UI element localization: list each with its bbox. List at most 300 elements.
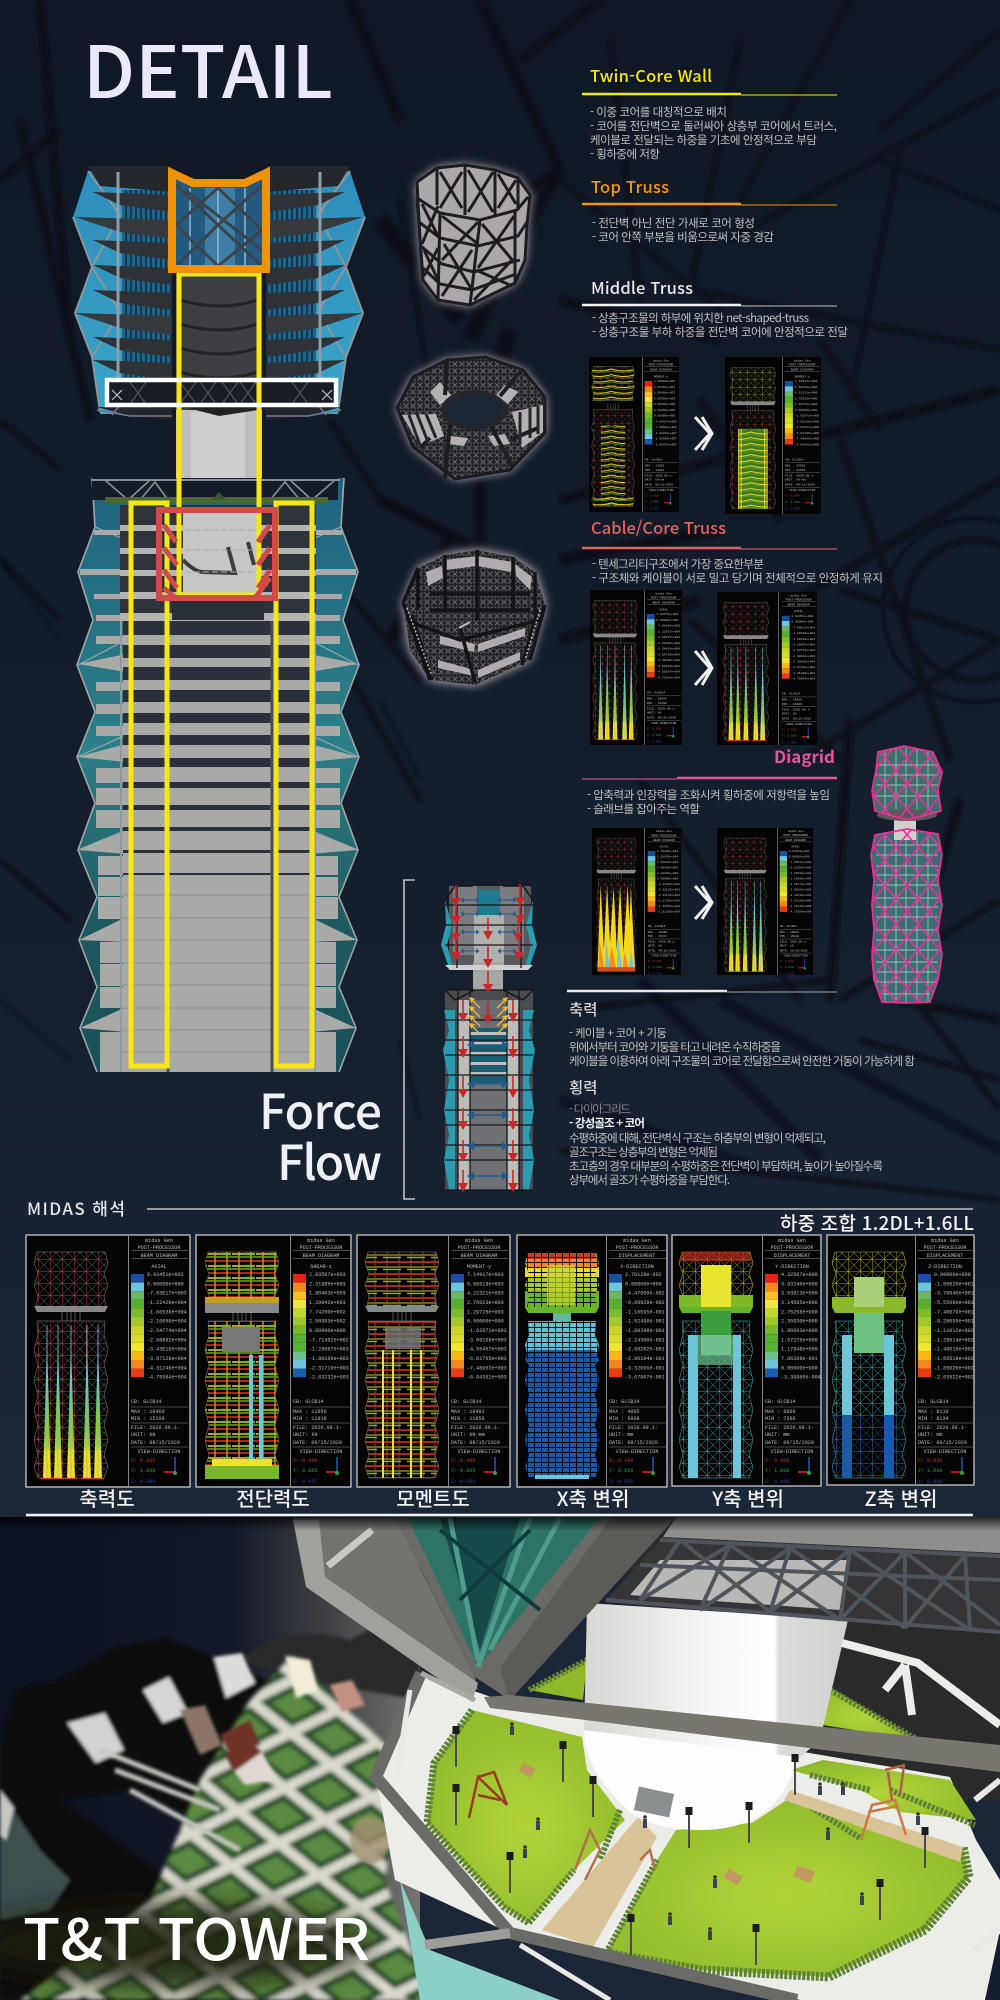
label: axial force: 축력도 <box>79 1483 135 1512</box>
MIDAS panel: axial force: Y: 1.000 <box>131 1468 155 1474</box>
MIDAS result: middle truss after: X: 0.000 <box>785 494 800 498</box>
MIDAS result: diagrid after: -1.22420e+004 <box>789 867 812 870</box>
text: axial force description: 위에서부터 코어와 기둥을 타고 내려온 수직하중을 <box>569 1039 781 1055</box>
MIDAS result: middle truss after: -7.48063e+006 <box>795 437 819 441</box>
MIDAS panel: bending moment: -6.01765e+003 <box>467 1356 507 1362</box>
MIDAS panel: bending moment: CB: GLCB14 <box>451 1399 482 1405</box>
MIDAS panel: X displacement: MIN : 6868 <box>609 1416 640 1422</box>
MIDAS result: diagrid after: -4.75364e+004 <box>789 911 812 914</box>
MIDAS panel: bending moment: Y: 0.865 <box>451 1468 475 1474</box>
MIDAS result: cable truss before: -1.22262e+004 <box>656 629 680 633</box>
heading: Twin-Core Wall: Twin-Core Wall <box>590 63 712 87</box>
MIDAS result: middle truss before: UNIT: kN·mm <box>645 478 664 482</box>
MIDAS result: diagrid before: MAX : 15330 <box>648 931 667 934</box>
teal cone structure <box>395 1517 676 1700</box>
MIDAS result: diagrid after: X: 0.000 <box>780 960 794 963</box>
MIDAS result: diagrid after: -1.66538e+004 <box>789 872 812 875</box>
outer white floor <box>376 1673 1000 2000</box>
MIDAS panel: X displacement: 2.70128e-002 <box>625 1272 662 1278</box>
MIDAS result: cable truss after: -2.98892e+004 <box>791 654 815 658</box>
MIDAS panel: axial force: -1.66538e+004 <box>147 1309 187 1315</box>
MIDAS panel: Y displacement: DISPLACEMENT <box>774 1253 810 1259</box>
MIDAS panel: shear force: BEAM DIAGRAM <box>303 1253 339 1259</box>
MIDAS panel: bending moment: MIN : 11956 <box>451 1416 485 1422</box>
MIDAS result: diagrid before: -5.32123e+003 <box>657 889 680 892</box>
MIDAS result: middle truss after: 5.68619e+006 <box>795 385 817 389</box>
MIDAS result: cable truss before: MAX : 15660 <box>647 696 667 700</box>
MIDAS panel: shear force: SHEAR-z <box>310 1264 332 1270</box>
MIDAS result: diagrid after: 0.00000e+000 <box>789 856 810 859</box>
MIDAS panel: Y displacement: MAX : 6866 <box>765 1409 796 1415</box>
text: twin-core wall description: - 이중 코어를 대칭적으로 배치 <box>590 104 727 120</box>
MIDAS panel: shear force: CB: GLCB14 <box>293 1399 324 1405</box>
heading: Force Flow: Force <box>259 1073 382 1143</box>
MIDAS panel: X displacement: -3.32006e-001 <box>625 1365 665 1371</box>
text: cable core truss description <box>592 556 883 586</box>
MIDAS panel: Y displacement: Y-DIRECTION <box>775 1264 809 1270</box>
MIDAS result: cable truss after <box>717 592 817 745</box>
heading: load combination: 하중 조합 1.2DL+1.6LL <box>780 1209 974 1236</box>
MIDAS panel: X displacement: MAX : 4805 <box>609 1409 640 1415</box>
truss model: cable core truss <box>403 550 545 685</box>
MIDAS panel: X displacement: Z:-0.052 <box>609 1479 633 1485</box>
MIDAS result: cable truss after: midas Gen <box>790 593 807 597</box>
MIDAS panel: Y displacement: -3.39960e-004 <box>781 1375 821 1381</box>
MIDAS result: middle truss after: CB: GLCB14 <box>785 457 804 461</box>
MIDAS result: cable truss before: -2.98716e+004 <box>656 652 680 656</box>
MIDAS panel: shear force: 1.28942e+003 <box>309 1300 346 1306</box>
MIDAS result: middle truss after: Y: 1.000 <box>785 500 800 504</box>
MIDAS result: diagrid before: VIEW-DIRECTION <box>652 955 677 958</box>
MIDAS result: diagrid after: Y: 1.000 <box>780 966 794 969</box>
lit city grid <box>20 1655 430 2000</box>
MIDAS result: diagrid after: MIN : 15209 <box>780 935 799 938</box>
MIDAS result: cable truss before <box>590 590 682 745</box>
MIDAS result: middle truss before: MAX : 13930 <box>645 463 664 467</box>
text: top truss description: - 코어 안쪽 부분을 비움으로써 자중 경감 <box>592 229 774 245</box>
MIDAS result: middle truss after: UNIT: kN·mm <box>785 478 806 482</box>
MIDAS panel: bending moment: -7.48063e+003 <box>467 1365 507 1371</box>
MIDAS result: cable truss after: UNIT: kN <box>782 712 797 716</box>
text: twin-core wall description <box>590 104 837 162</box>
project title: T&T TOWER <box>23 1895 370 1977</box>
MIDAS result: diagrid after: midas Gen <box>788 829 804 833</box>
MIDAS result: diagrid after: MAX : 15660 <box>780 931 799 934</box>
MIDAS panel: bending moment: -3.09169e+003 <box>467 1337 507 1343</box>
MIDAS result: cable truss before: -7.81480e+003 <box>656 624 680 628</box>
MIDAS panel: axial force: -4.75364e+004 <box>147 1375 187 1381</box>
truss model: twin core wall <box>417 165 530 305</box>
MIDAS panel: Y displacement: UNIT: mm <box>765 1432 789 1438</box>
MIDAS result: middle truss after: -3.09169e+006 <box>795 419 819 423</box>
MIDAS panel: shear force: 2.83507e+003 <box>309 1272 346 1278</box>
MIDAS result: cable truss before: VIEW-DIRECTION <box>651 721 677 725</box>
MIDAS panel: X displacement: -2.60202e-001 <box>625 1347 665 1353</box>
MIDAS result: middle truss after: 0.00000e+000 <box>795 408 817 412</box>
MIDAS panel: axial force: -3.87128e+004 <box>147 1356 187 1362</box>
MIDAS panel: Y displacement <box>672 1235 822 1486</box>
MIDAS result: diagrid after: 9.93451e+002 <box>789 850 810 853</box>
MIDAS result: cable truss after: MIN : 15209 <box>782 702 802 706</box>
MIDAS panel: shear force: VIEW-DIRECTION <box>300 1449 342 1455</box>
MIDAS result: diagrid before <box>592 828 681 975</box>
MIDAS panel: Z displacement: -1.11012e+002 <box>934 1328 974 1334</box>
text: diagrid description: - 압축력과 인장력을 조화시켜 횡하중에 저항력을 높임 <box>587 787 830 803</box>
MIDAS panel: X displacement: VIEW-DIRECTION <box>616 1449 658 1455</box>
truss model: middle ring <box>397 357 545 479</box>
MIDAS panel: Y displacement: POST-PROCESSOR <box>771 1245 813 1251</box>
MIDAS result: cable truss before: AXIAL <box>659 607 668 611</box>
MIDAS panel: shear force: -1.80189e+003 <box>309 1356 349 1362</box>
MIDAS panel: Z displacement: -1.48016e+002 <box>934 1347 974 1353</box>
text: diagrid description <box>587 787 830 817</box>
MIDAS panel: Y displacement: 1.17948e+000 <box>781 1347 818 1353</box>
MIDAS result: diagrid before: X: 0.000 <box>648 960 662 963</box>
MIDAS panel: bending moment <box>357 1235 510 1487</box>
MIDAS panel: X displacement: X-DIRECTION <box>620 1264 654 1270</box>
MIDAS panel: Z displacement: -1.85020e+001 <box>934 1281 974 1287</box>
MIDAS result: diagrid after: -2.10656e+004 <box>789 878 812 881</box>
MIDAS panel: Z displacement: DISPLACEMENT <box>927 1253 963 1259</box>
MIDAS panel: Z displacement: -5.55060e+001 <box>934 1300 974 1306</box>
yellow frames: lower twin core <box>131 503 312 1066</box>
MIDAS panel: X displacement: -1.16595e-001 <box>625 1309 665 1315</box>
MIDAS result: diagrid before: -1.17220e+004 <box>657 900 680 903</box>
MIDAS panel: shear force: UNIT: kN <box>293 1432 317 1438</box>
label: shear force: 전단력도 <box>236 1483 310 1512</box>
MIDAS panel: Z displacement: -1.29514e+002 <box>934 1337 974 1343</box>
MIDAS panel: Y displacement: Z: 0.000 <box>765 1479 789 1485</box>
MIDAS panel: Y displacement: 4.32567e+000 <box>781 1272 818 1278</box>
MIDAS panel: Z displacement: -1.85020e+002 <box>934 1365 974 1371</box>
MIDAS result: cable truss after: X: 0.000 <box>782 727 797 731</box>
MIDAS panel: shear force: 2.31985e+003 <box>309 1281 346 1287</box>
main tower elevation with highlighted frames <box>73 166 365 1072</box>
MIDAS panel: Z displacement: 0.00000e+000 <box>934 1272 971 1278</box>
MIDAS panel: bending moment: BEAM DIAGRAM <box>461 1253 497 1259</box>
MIDAS panel: X displacement: 0.00000e+000 <box>625 1281 662 1287</box>
MIDAS panel: X displacement: -1.52496e-001 <box>625 1319 665 1325</box>
MIDAS panel: axial force: X: 0.000 <box>131 1458 155 1464</box>
MIDAS result: cable truss before: -1.66375e+004 <box>656 635 680 639</box>
MIDAS panel: Z displacement: VIEW-DIRECTION <box>924 1449 966 1455</box>
MIDAS result: diagrid before: 1.70204e+004 <box>657 850 678 853</box>
MIDAS result: diagrid before: BEAM DIAGRAM <box>653 839 675 842</box>
MIDAS panel: axial force: CB: GLCB14 <box>131 1399 162 1405</box>
white side structure <box>842 1643 1000 1725</box>
divider above force text <box>567 990 727 992</box>
MIDAS panel: Y displacement: VIEW-DIRECTION <box>771 1449 813 1455</box>
MIDAS result: middle truss before: MIN : 13907 <box>645 468 664 472</box>
MIDAS panel: X displacement: midas Gen <box>623 1238 651 1244</box>
MIDAS panel: axial force: MIN : 15209 <box>131 1416 165 1422</box>
MIDAS result: middle truss before: X: 0.000 <box>645 494 659 498</box>
dark shade behind project title <box>0 1905 370 1985</box>
MIDAS result: cable truss after: BEAM DIAGRAM <box>788 602 810 606</box>
MIDAS result: cable truss after: POST-PROCESSOR <box>786 598 812 602</box>
MIDAS result: diagrid before: POST-PROCESSOR <box>652 834 677 837</box>
small houses and buildings <box>100 1656 390 1864</box>
MIDAS panel: bending moment: -4.55467e+003 <box>467 1347 507 1353</box>
label: bending moment: 모멘트도 <box>396 1483 470 1512</box>
MIDAS panel: Y displacement: DATE: 09/15/2020 <box>765 1440 814 1446</box>
MIDAS panel: Z displacement: DATE: 09/15/2020 <box>918 1440 967 1446</box>
MIDAS panel: Z displacement: Y: 1.000 <box>918 1468 942 1474</box>
MIDAS panel: bending moment: FILE: 2020.09.1- <box>451 1425 500 1431</box>
MIDAS panel: X displacement: -3.67907e-001 <box>625 1375 665 1381</box>
MIDAS panel: bending moment: UNIT: kN·mm <box>451 1432 485 1438</box>
MIDAS result: middle truss before: 5.90558e+006 <box>654 396 675 400</box>
bracket <box>404 880 415 1199</box>
bottom divider line <box>26 1514 973 1516</box>
MIDAS panel: Y displacement: 3.93240e+000 <box>781 1281 818 1287</box>
MIDAS panel: shear force: -2.31710e+003 <box>309 1365 349 1371</box>
MIDAS panel: axial force: -2.54774e+004 <box>147 1328 187 1334</box>
MIDAS result: cable truss before: BEAM DIAGRAM <box>653 600 675 605</box>
MIDAS result: cable truss after: CB: GLCB14 <box>782 691 800 695</box>
MIDAS panel: Z displacement: MAX : 8110 <box>918 1409 949 1415</box>
MIDAS result: cable truss before: FILE: 2020.09.1- <box>647 706 676 710</box>
MIDAS result: cable truss before: -4.75184e+004 <box>656 675 680 679</box>
text: top truss description <box>592 215 774 245</box>
MIDAS result: middle truss before: DATE: 09/15/2020 <box>645 482 673 487</box>
MIDAS result: diagrid after: DATE: 09/15/2020 <box>780 948 808 952</box>
chevron arrow <box>695 417 712 450</box>
diagrid tower model <box>871 746 942 1003</box>
heading: axial force: 축력 <box>569 998 598 1020</box>
MIDAS panel: bending moment: POST-PROCESSOR <box>458 1245 500 1251</box>
MIDAS result: diagrid after: CB: GLCB14 <box>780 925 797 928</box>
divider above force text, thin part <box>727 991 837 993</box>
MIDAS result: middle truss after: MAX : 13992 <box>785 463 806 467</box>
MIDAS result: middle truss after: VIEW-DIRECTION <box>789 488 816 492</box>
MIDAS result: middle truss before <box>589 357 679 512</box>
MIDAS result: diagrid before: 1.05943e+004 <box>657 861 678 864</box>
MIDAS panel: axial force: midas Gen <box>145 1238 173 1244</box>
MIDAS result: diagrid before: 0.00000e+000 <box>657 878 678 881</box>
MIDAS result: cable truss after: Z: 0.000 <box>782 740 797 744</box>
MIDAS result: middle truss before: Z: 0.000 <box>645 506 659 511</box>
MIDAS result: diagrid after: VIEW-DIRECTION <box>784 955 808 958</box>
MIDAS panel: axial force: -7.83017e+003 <box>147 1291 187 1297</box>
MIDAS result: middle truss before: 1.06250e+006 <box>654 408 675 412</box>
MIDAS panel: shear force: midas Gen <box>307 1238 335 1244</box>
text: lateral force description: 상부에서 골조가 수평하중을 부담한다. <box>569 1172 730 1188</box>
MIDAS panel: axial force: MAX : 18460 <box>131 1409 165 1415</box>
MIDAS panel: X displacement: X:-0.499 <box>609 1458 633 1464</box>
MIDAS panel: bending moment: VIEW-DIRECTION <box>458 1449 500 1455</box>
park furniture and lamps <box>452 1722 928 1965</box>
MIDAS result: diagrid after: Z: 0.000 <box>780 972 794 975</box>
orange frame: top truss <box>172 173 266 269</box>
MIDAS panel: bending moment: X:-0.499 <box>451 1458 475 1464</box>
yellow frame: upper core <box>179 274 259 595</box>
MIDAS result: middle truss after: MIN : 11956 <box>785 468 806 472</box>
MIDAS panel: Y displacement: X: 0.000 <box>765 1458 789 1464</box>
brick path <box>542 1817 657 1947</box>
MIDAS panel: bending moment: DATE: 09/15/2020 <box>451 1440 500 1446</box>
text: axial force description: - 케이블 + 코어 + 기둥 <box>569 1025 667 1041</box>
MIDAS panel: axial force: 9.93451e+002 <box>147 1272 184 1278</box>
text: twin-core wall description: - 횡하중에 저항 <box>590 146 660 162</box>
MIDAS panel: shear force: -7.71452e+002 <box>309 1337 349 1343</box>
MIDAS result: cable truss after: -7.83017e+003 <box>791 625 815 629</box>
MIDAS result: middle truss after: POST-PROCESSOR <box>789 363 816 367</box>
MIDAS result: middle truss before: MOMENT-y <box>654 374 668 378</box>
MIDAS panel: shear force: Z:-0.052 <box>293 1479 317 1485</box>
MIDAS panel: X displacement: CB: GLCB14 <box>609 1399 640 1405</box>
MIDAS panel: Z displacement: MIN : 8134 <box>918 1416 949 1422</box>
dark buildings <box>0 1638 290 2000</box>
MIDAS result: cable truss after: MAX : 15660 <box>782 698 802 702</box>
MIDAS panel: Z displacement: X: 0.000 <box>918 1458 942 1464</box>
MIDAS panel: axial force: -2.10656e+004 <box>147 1319 187 1325</box>
MIDAS result: diagrid before: Z: 0.000 <box>648 972 662 975</box>
MIDAS panel: X displacement: -1.88398e-001 <box>625 1328 665 1334</box>
text: lateral force description: 골조구조는 상층부의 변형은 억제됨 <box>569 1144 718 1160</box>
MIDAS panel: bending moment: 2.76023e+003 <box>467 1300 504 1306</box>
MIDAS result: diagrid after: -3.43010e+004 <box>789 894 812 897</box>
heading: Force Flow: Flow <box>277 1124 382 1194</box>
MIDAS panel: axial force: DATE: 09/15/2020 <box>131 1440 180 1446</box>
central core shaft <box>176 274 262 500</box>
MIDAS result: diagrid before: CB: GLCB14 <box>648 925 666 928</box>
MIDAS panel: Y displacement: MIN : 7396 <box>765 1416 796 1422</box>
text: diagrid description: - 슬래브를 잡아주는 역할 <box>587 801 700 817</box>
MIDAS panel: Z displacement: -7.40079e+001 <box>934 1309 974 1315</box>
MIDAS panel: Z displacement: CB: GLCB14 <box>918 1399 949 1405</box>
MIDAS result: cable truss before: Z: 0.000 <box>647 739 662 744</box>
MIDAS result: cable truss before: 1.00773e+003 <box>656 612 678 616</box>
MIDAS result: cable truss before: Y: 1.000 <box>647 733 662 737</box>
lawn: rear right <box>810 1687 918 1740</box>
hedges <box>427 1660 975 1977</box>
text: lateral force description: - 강성골조 + 코어 <box>569 1115 645 1131</box>
MIDAS result: diagrid before: 4.28259e+003 <box>657 872 678 875</box>
MIDAS panel: bending moment: 0.00000e+000 <box>467 1319 504 1325</box>
MIDAS panel: Y displacement: 3.53913e+000 <box>781 1291 818 1297</box>
MIDAS result: middle truss before: POST-PROCESSOR <box>649 363 674 367</box>
MIDAS panel: bending moment: midas Gen <box>465 1238 493 1244</box>
MIDAS result: middle truss after: midas Gen <box>794 358 811 362</box>
MIDAS result: cable truss after: -1.22420e+004 <box>791 631 815 635</box>
MIDAS result: cable truss before: UNIT: kN <box>647 711 662 715</box>
MIDAS panel: Z displacement: -9.25099e+001 <box>934 1319 974 1325</box>
MIDAS result: diagrid after <box>717 828 813 975</box>
left window frame beam <box>293 1518 478 1702</box>
label: Z displacement: Z축 변위 <box>865 1483 937 1512</box>
MIDAS panel: Z displacement: POST-PROCESSOR <box>924 1245 966 1251</box>
MIDAS result: middle truss after <box>725 357 821 514</box>
MIDAS panel: X displacement: -2.96104e-001 <box>625 1356 665 1362</box>
MIDAS result: middle truss before: -7.30012e+006 <box>654 425 677 429</box>
MIDAS panel: shear force: 0.00000e+000 <box>309 1328 346 1334</box>
MIDAS result: cable truss after: -4.75364e+004 <box>791 677 815 681</box>
MIDAS panel: X displacement: DATE: 09/15/2020 <box>609 1440 658 1446</box>
MIDAS result: diagrid before: 7.49559e+003 <box>657 867 678 870</box>
MIDAS result: middle truss after: FILE: 2020.09.1- <box>785 473 815 477</box>
heading: lateral force: 횡력 <box>569 1076 598 1098</box>
MIDAS result: cable truss after: -1.66538e+004 <box>791 637 815 641</box>
heading: Middle Truss: Middle Truss <box>591 275 693 299</box>
MIDAS result: cable truss after: Y: 1.000 <box>782 734 797 738</box>
MIDAS result: cable truss after: -3.43010e+004 <box>791 660 815 664</box>
MIDAS result: middle truss before: -4.89857e+005 <box>654 419 677 423</box>
MIDAS result: diagrid before: Y: 1.000 <box>648 966 662 969</box>
MIDAS panel: shear force: 1.80463e+003 <box>309 1291 346 1297</box>
MIDAS panel: axial force: -1.22420e+004 <box>147 1300 187 1306</box>
MIDAS result: cable truss before: -2.10489e+004 <box>656 641 680 645</box>
MIDAS result: middle truss after: BEAM DIAGRAM <box>791 368 814 372</box>
MIDAS panel: shear force: MIN : 11918 <box>293 1416 327 1422</box>
MIDAS result: middle truss before: 0.00000e+000 <box>654 414 675 418</box>
MIDAS panel: bending moment: MOMENT-y <box>467 1264 491 1270</box>
MIDAS result: diagrid before: FILE: 2020.09.1- <box>648 940 676 943</box>
MIDAS panel: Z displacement: -3.70040e+001 <box>934 1291 974 1297</box>
MIDAS panel: shear force: POST-PROCESSOR <box>300 1245 342 1251</box>
MIDAS result: diagrid before: midas Gen <box>656 829 672 833</box>
MIDAS result: cable truss after: AXIAL <box>794 609 803 613</box>
MIDAS panel: Z displacement: UNIT: mm <box>918 1432 942 1438</box>
text: twin-core wall description: - 코어를 전단벽으로 둘러싸아 상층부 코어에서 트러스, <box>590 118 837 134</box>
MIDAS result: cable truss after: FILE: 2020.09.1- <box>782 707 811 711</box>
MIDAS result: cable truss before: MIN : 15209 <box>647 701 667 705</box>
MIDAS result: middle truss before: FILE: 2020.09.1- <box>645 473 673 477</box>
MIDAS result: middle truss before: 1.00001e+007 <box>654 391 675 395</box>
text: cable core truss description: - 텐세그리티구조에서 가장 중요한부분 <box>592 556 764 572</box>
MIDAS panel: axial force: AXIAL <box>151 1264 167 1270</box>
MIDAS result: diagrid before: MIN : 15317 <box>648 935 667 938</box>
roof truss <box>500 1517 1000 1700</box>
text: lateral force description <box>569 1101 883 1188</box>
tower upper block <box>73 166 365 420</box>
MIDAS panel: axial force: -3.43010e+004 <box>147 1347 187 1353</box>
MIDAS panel: X displacement: POST-PROCESSOR <box>616 1245 658 1251</box>
MIDAS panel: Y displacement: 7.86208e-001 <box>781 1356 818 1362</box>
MIDAS panel: shear force: DATE: 09/15/2020 <box>293 1440 342 1446</box>
dark corner lower right <box>985 1935 1000 2000</box>
MIDAS result: diagrid after: UNIT: kN <box>780 944 794 948</box>
MIDAS panel: shear force: MAX : 11956 <box>293 1409 327 1415</box>
MIDAS result: middle truss after: 1.29725e+006 <box>795 402 817 406</box>
MIDAS panel: axial force: 0.00000e+000 <box>147 1281 184 1287</box>
middle truss strip <box>108 380 334 405</box>
MIDAS result: cable truss before: -3.86943e+004 <box>656 664 680 668</box>
MIDAS result: cable truss before: -3.42830e+004 <box>656 658 680 662</box>
MIDAS result: diagrid before: DATE: 09/15/2020 <box>648 948 676 952</box>
MIDAS result: cable truss after: VIEW-DIRECTION <box>786 722 812 726</box>
MIDAS result: cable truss before: DATE: 09/15/2020 <box>647 715 676 720</box>
lawn: main <box>606 1797 969 1977</box>
MIDAS panel: axial force: FILE: 2020.09.1- <box>131 1425 180 1431</box>
white frame: middle truss <box>107 380 336 405</box>
MIDAS panel: shear force: -2.83232e+003 <box>309 1375 349 1381</box>
MIDAS panel: Y displacement: 1.96603e+000 <box>781 1328 818 1334</box>
MIDAS result: middle truss before: midas Gen <box>653 358 669 362</box>
text: axial force description: 케이블을 이용하여 아래 구조물의 코어로 전달함으로써 안전한 거동이 가능하게 함 <box>569 1053 915 1069</box>
lawn: right strip <box>791 1760 976 1820</box>
MIDAS panel: shear force: X:-0.499 <box>293 1458 317 1464</box>
MIDAS panel: Y displacement: CB: GLCB14 <box>765 1399 796 1405</box>
text: twin-core wall description: 케이블로 전달되는 하중을 기초에 안정적으로 부담 <box>590 132 817 148</box>
MIDAS panel: Y displacement: 0.00000e+000 <box>781 1365 818 1371</box>
MIDAS panel: shear force: FILE: 2020.09.1- <box>293 1425 342 1431</box>
floor ring beams <box>376 1673 1000 2000</box>
MIDAS result: diagrid before: -1.49253e+004 <box>657 905 680 908</box>
MIDAS panel: X displacement: -2.24300e-001 <box>625 1337 665 1343</box>
MIDAS result: cable truss after: 9.93451e+002 <box>791 614 814 618</box>
MIDAS panel: Y displacement: FILE: 2020.09.1- <box>765 1425 814 1431</box>
